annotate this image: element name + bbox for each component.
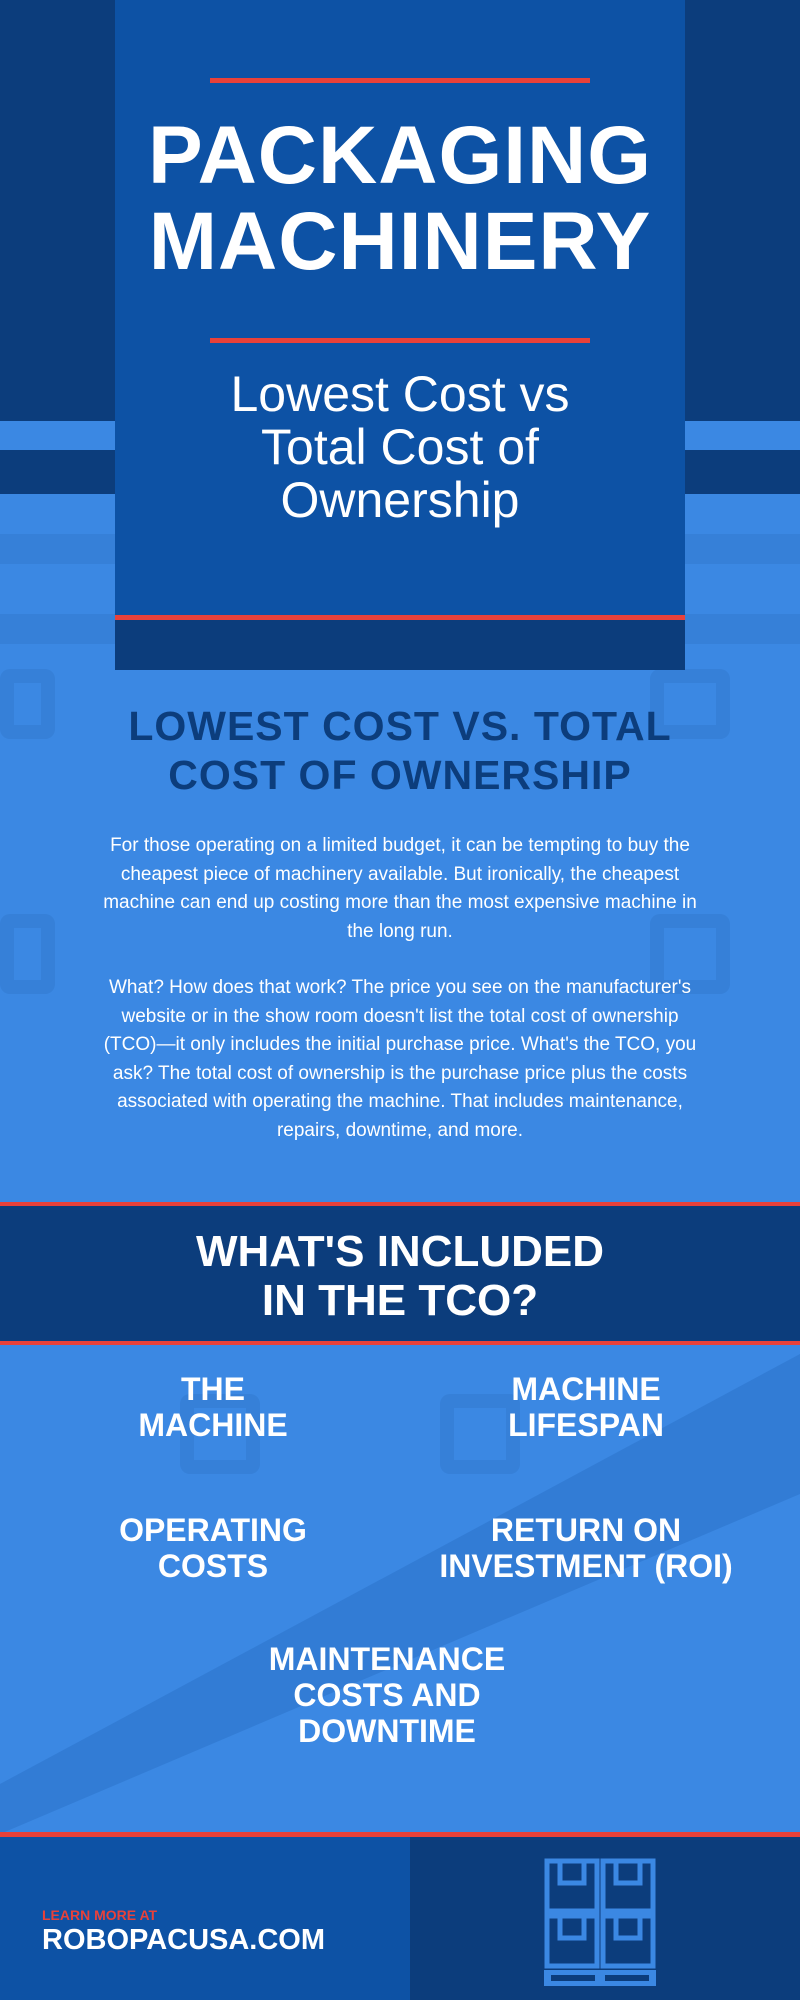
title (148, 110, 652, 287)
item: the machine (138, 1371, 288, 1443)
item: maintenance: DOWNTIME (298, 1713, 476, 1749)
item: the machine: MACHINE (138, 1407, 288, 1443)
item: maintenance (269, 1641, 505, 1749)
banner: what's included: WHAT'S INCLUDED (196, 1227, 604, 1276)
icon: pallet of boxes (544, 1858, 656, 1986)
item: operating costs: COSTS (158, 1548, 268, 1584)
subtitle: Total Cost of (261, 419, 539, 475)
item: machine lifespan (508, 1371, 664, 1443)
item: ROI: RETURN ON (491, 1512, 681, 1548)
text block: intro: For those operating on a limited budget, it can be tempting to buy the cheapest piece of machinery available. But ironically, the cheapest machine can end up costing more than the most expensive machine in the long run. (103, 835, 697, 942)
banner: what's included (0, 1202, 800, 1345)
section heading: COST OF OWNERSHIP (168, 752, 632, 798)
item: ROI (439, 1512, 733, 1584)
background: top navy band (0, 0, 800, 421)
section heading (128, 703, 672, 798)
subtitle: Lowest Cost vs (230, 366, 570, 422)
background pattern: faint shelving (0, 534, 800, 1832)
subtitle: Ownership (280, 472, 520, 528)
section heading: LOWEST COST VS. TOTAL (128, 703, 672, 749)
footer text (42, 1907, 325, 1956)
text block: intro: What? How does that work? The price you see on the manufacturer's website or in the show room doesn't list the total cost of ownership (TCO)—it only includes the initial purchase price. What's the TCO, you ask? The total cost of ownership is the purchase price plus the costs associated with operating the machine. That includes maintenance, repairs, downtime, and more. (104, 977, 696, 1140)
item: machine lifespan: MACHINE (511, 1371, 661, 1407)
footer text: LEARN MORE AT (42, 1907, 157, 1923)
subtitle (230, 366, 570, 528)
item: machine lifespan: LIFESPAN (508, 1407, 664, 1443)
title: MACHINERY (149, 196, 651, 287)
item: operating costs: OPERATING (119, 1512, 307, 1548)
item: ROI: INVESTMENT (ROI) (439, 1548, 733, 1584)
item: the machine: THE (181, 1371, 245, 1407)
item: maintenance: COSTS AND (293, 1677, 481, 1713)
banner: what's included: IN THE TCO? (262, 1276, 538, 1325)
title: PACKAGING (148, 110, 652, 201)
text block: intro (103, 835, 697, 1140)
footer (0, 1832, 800, 2000)
item: operating costs (119, 1512, 307, 1584)
item: maintenance: MAINTENANCE (269, 1641, 505, 1677)
footer text: ROBOPACUSA.COM (42, 1924, 325, 1956)
title panel (115, 0, 685, 670)
